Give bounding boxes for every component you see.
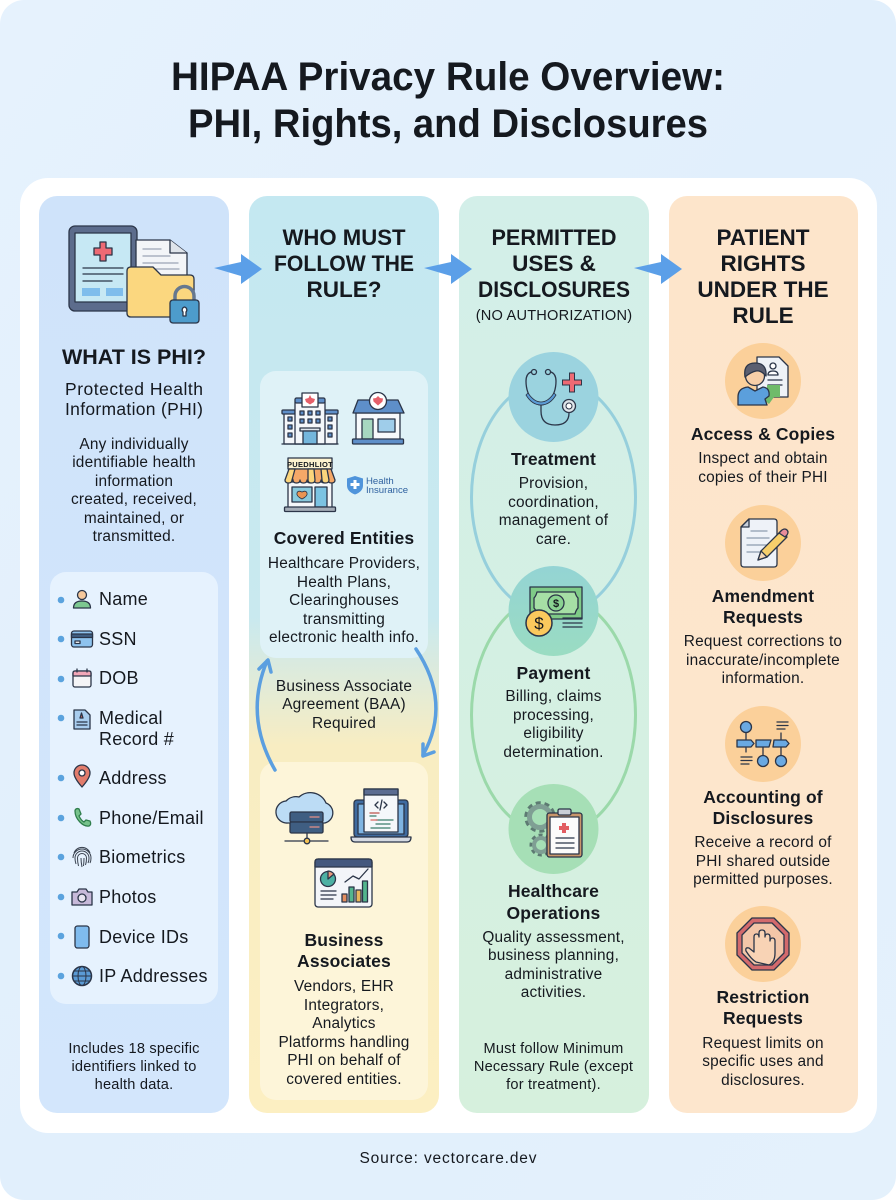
text: treatment	[499, 449, 609, 548]
text: payment	[503, 663, 604, 761]
heading: what is PHI: WHAT IS PHI?	[62, 345, 206, 369]
identifier labels: Record #	[99, 729, 174, 749]
text: BAA required	[276, 678, 412, 732]
icon: name	[74, 590, 90, 608]
text: restriction requests: disclosures.	[721, 1072, 805, 1089]
text: treatment: Provision,	[519, 475, 588, 492]
icon: cloud server	[276, 793, 333, 844]
arrow: who must follow to permitted uses	[424, 254, 472, 284]
heading: business associates	[297, 930, 391, 971]
title	[171, 55, 725, 146]
text: amendment requests: information.	[722, 670, 804, 687]
text: PHI description: information	[95, 473, 173, 490]
flow ring: payment	[472, 595, 636, 835]
icon: calendar	[73, 669, 91, 687]
icon: fingerprint	[73, 847, 91, 867]
text: no authorization: (NO AUTHORIZATION)	[476, 308, 632, 324]
text: accounting of disclosures: Disclosures	[713, 808, 814, 828]
text: access and copies: copies of their PHI	[698, 469, 828, 486]
icon: tablet, folder and lock	[69, 226, 199, 323]
identifier labels	[99, 589, 208, 986]
text: accounting of disclosures: PHI shared outside	[696, 853, 830, 870]
icon: pharmacy	[284, 458, 336, 512]
text: healthcare operations: business planning,	[488, 947, 619, 964]
text: payment: determination.	[503, 744, 604, 761]
text: restriction requests: Requests	[723, 1008, 803, 1028]
text: identifiers note: Includes 18 specific	[68, 1041, 200, 1057]
identifier labels: DOB	[99, 668, 139, 688]
heading: patient rights	[697, 225, 829, 328]
heading: who must follow: RULE?	[306, 277, 382, 302]
bullets	[58, 597, 64, 979]
text: access and copies: Inspect and obtain	[698, 450, 828, 467]
text: covered entities description: Clearinghouses	[289, 592, 399, 609]
icon: health insurance	[347, 476, 408, 496]
text: PHI description: maintained, or	[84, 510, 184, 527]
text: accounting of disclosures: permitted purposes.	[693, 871, 833, 888]
icon: globe	[72, 966, 92, 986]
identifier labels: Photos	[99, 887, 157, 907]
text: accounting of disclosures: Accounting of	[703, 787, 823, 807]
icon: address pin	[74, 765, 90, 787]
text: PHI definition	[65, 379, 203, 419]
icon: payment money: $	[534, 614, 544, 633]
identifier labels: IP Addresses	[99, 966, 208, 986]
heading: who must follow	[274, 225, 414, 302]
text: PHI definition: Protected Health	[65, 379, 203, 399]
text: payment: Payment	[516, 663, 591, 683]
icon: access person and document	[725, 343, 801, 419]
icon: clinic	[352, 392, 404, 444]
source: Source: vectorcare.dev	[360, 1150, 537, 1167]
flow ring: treatment	[472, 379, 636, 615]
icon: payment money: $	[553, 598, 559, 610]
heading: covered entities: Covered Entities	[274, 528, 414, 548]
icon: SSN card	[72, 631, 92, 647]
icon: medical record	[74, 710, 90, 729]
icon: phone	[75, 809, 91, 826]
text: access and copies: Access & Copies	[691, 424, 835, 444]
text: healthcare operations: administrative	[505, 966, 602, 983]
text: business associates description: Platforms handling	[278, 1034, 410, 1051]
text: treatment: management of	[499, 512, 609, 529]
arrow: BA to covered	[257, 660, 275, 770]
heading: permitted uses: USES &	[512, 251, 596, 276]
heading: who must follow: WHO MUST	[282, 225, 406, 250]
icon: laptop code	[351, 789, 411, 842]
text: healthcare operations: activities.	[521, 984, 586, 1001]
panel: patient rights	[669, 196, 858, 1113]
text: PHI description: identifiable health	[72, 454, 196, 471]
text: restriction requests: specific uses and	[702, 1053, 824, 1070]
arrow: permitted uses to patient rights	[634, 254, 682, 284]
text: identifiers note	[68, 1041, 200, 1093]
panel: permitted uses and disclosures	[459, 196, 649, 1113]
text: payment: eligibility	[523, 725, 584, 742]
icon: analytics dashboard	[315, 859, 372, 907]
text: PHI description: transmitted.	[93, 528, 175, 545]
text: healthcare operations: Operations	[507, 903, 601, 923]
card: covered entities	[260, 371, 428, 658]
icon: amendment document and pencil	[725, 505, 801, 581]
icon: health insurance: Health	[366, 476, 394, 487]
icon: pharmacy: PUEDHLIOT	[287, 460, 333, 469]
panel: who must follow the rule	[214, 196, 858, 1167]
icon: camera	[72, 889, 92, 905]
heading: permitted uses: PERMITTED	[492, 225, 616, 250]
text: minimum necessary note: for treatment).	[506, 1077, 601, 1093]
heading: patient rights: RULE	[732, 303, 794, 328]
panel: what is PHI	[39, 196, 229, 1113]
text: amendment requests: Amendment	[712, 586, 814, 606]
text: accounting of disclosures	[693, 787, 833, 888]
text: amendment requests: inaccurate/incomplete	[686, 652, 840, 669]
card: business associates	[257, 649, 436, 1100]
identifier labels: SSN	[99, 629, 137, 649]
text: treatment: care.	[536, 531, 571, 548]
text: restriction requests: Request limits on	[702, 1035, 824, 1052]
icon: restriction stop hand	[725, 906, 801, 982]
text: healthcare operations: Healthcare	[508, 881, 599, 901]
identifier labels: Biometrics	[99, 847, 186, 867]
text: healthcare operations: Quality assessment,	[482, 929, 625, 946]
identifier labels: Address	[99, 768, 167, 788]
heading: business associates: Associates	[297, 951, 391, 971]
title: PHI, Rights, and Disclosures	[188, 102, 708, 146]
identifier labels: Medical	[99, 708, 163, 728]
text: identifiers note: health data.	[95, 1077, 173, 1093]
text: covered entities description: electronic health info.	[269, 629, 419, 646]
icon: treatment stethoscope	[508, 352, 598, 442]
text: covered entities description: transmitting	[303, 611, 385, 628]
text: minimum necessary note	[474, 1041, 633, 1093]
arrow: PHI to who must follow	[214, 254, 262, 284]
text: PHI description: created, received,	[71, 491, 197, 508]
text: amendment requests	[684, 586, 842, 687]
arrow: covered to BA	[416, 649, 436, 756]
panel: identifier list	[50, 572, 218, 1004]
text: business associates description	[278, 978, 410, 1088]
text: BAA required: Agreement (BAA)	[282, 696, 406, 713]
text: covered entities description: Healthcare Providers,	[268, 555, 420, 572]
text: amendment requests: Requests	[723, 607, 803, 627]
text: payment: Billing, claims	[505, 688, 602, 705]
text: treatment: coordination,	[508, 494, 599, 511]
text: business associates description: covered entities.	[286, 1071, 402, 1088]
text: business associates description: Analytics	[312, 1015, 376, 1032]
text: business associates description: PHI on behalf of	[287, 1052, 401, 1069]
icon: hospital	[282, 393, 338, 444]
text: access and copies	[691, 424, 835, 486]
icon: operations gears and clipboard	[508, 784, 598, 874]
text: amendment requests: Request corrections to	[684, 633, 842, 650]
text: payment: processing,	[513, 707, 594, 724]
text: BAA required: Business Associate	[276, 678, 412, 695]
heading: permitted uses	[478, 225, 630, 302]
icon: accounting of disclosures	[725, 706, 801, 782]
heading: patient rights: UNDER THE	[697, 277, 829, 302]
heading: permitted uses: DISCLOSURES	[478, 277, 630, 302]
title: HIPAA Privacy Rule Overview:	[171, 55, 725, 99]
text: identifiers note: identifiers linked to	[71, 1059, 197, 1075]
text: BAA required: Required	[312, 715, 376, 732]
identifier labels: Phone/Email	[99, 808, 204, 828]
text: accounting of disclosures: Receive a record of	[694, 834, 832, 851]
main white panel	[20, 178, 877, 1133]
icon: payment money	[508, 566, 598, 656]
text: PHI definition: Information (PHI)	[65, 399, 203, 419]
text: PHI description: Any individually	[79, 436, 189, 453]
icon: health insurance: Insurance	[366, 485, 408, 496]
heading: patient rights: PATIENT	[717, 225, 810, 250]
text: healthcare operations	[482, 881, 625, 1001]
text: covered entities description: Health Plans,	[297, 574, 391, 591]
heading: business associates: Business	[304, 930, 384, 950]
text: covered entities description	[268, 555, 420, 646]
text: restriction requests	[702, 987, 824, 1089]
text: minimum necessary note: Necessary Rule (except	[474, 1059, 633, 1075]
text: business associates description: Integrators,	[304, 997, 384, 1014]
identifier labels: Device IDs	[99, 927, 189, 947]
text: PHI description	[71, 436, 197, 545]
text: treatment: Treatment	[511, 449, 596, 469]
identifier labels: Name	[99, 589, 148, 609]
text: restriction requests: Restriction	[716, 987, 810, 1007]
text: minimum necessary note: Must follow Minimum	[483, 1041, 624, 1057]
icon: device	[75, 926, 89, 948]
heading: patient rights: RIGHTS	[720, 251, 806, 276]
text: business associates description: Vendors, EHR	[294, 978, 394, 995]
heading: who must follow: FOLLOW THE	[274, 251, 414, 276]
